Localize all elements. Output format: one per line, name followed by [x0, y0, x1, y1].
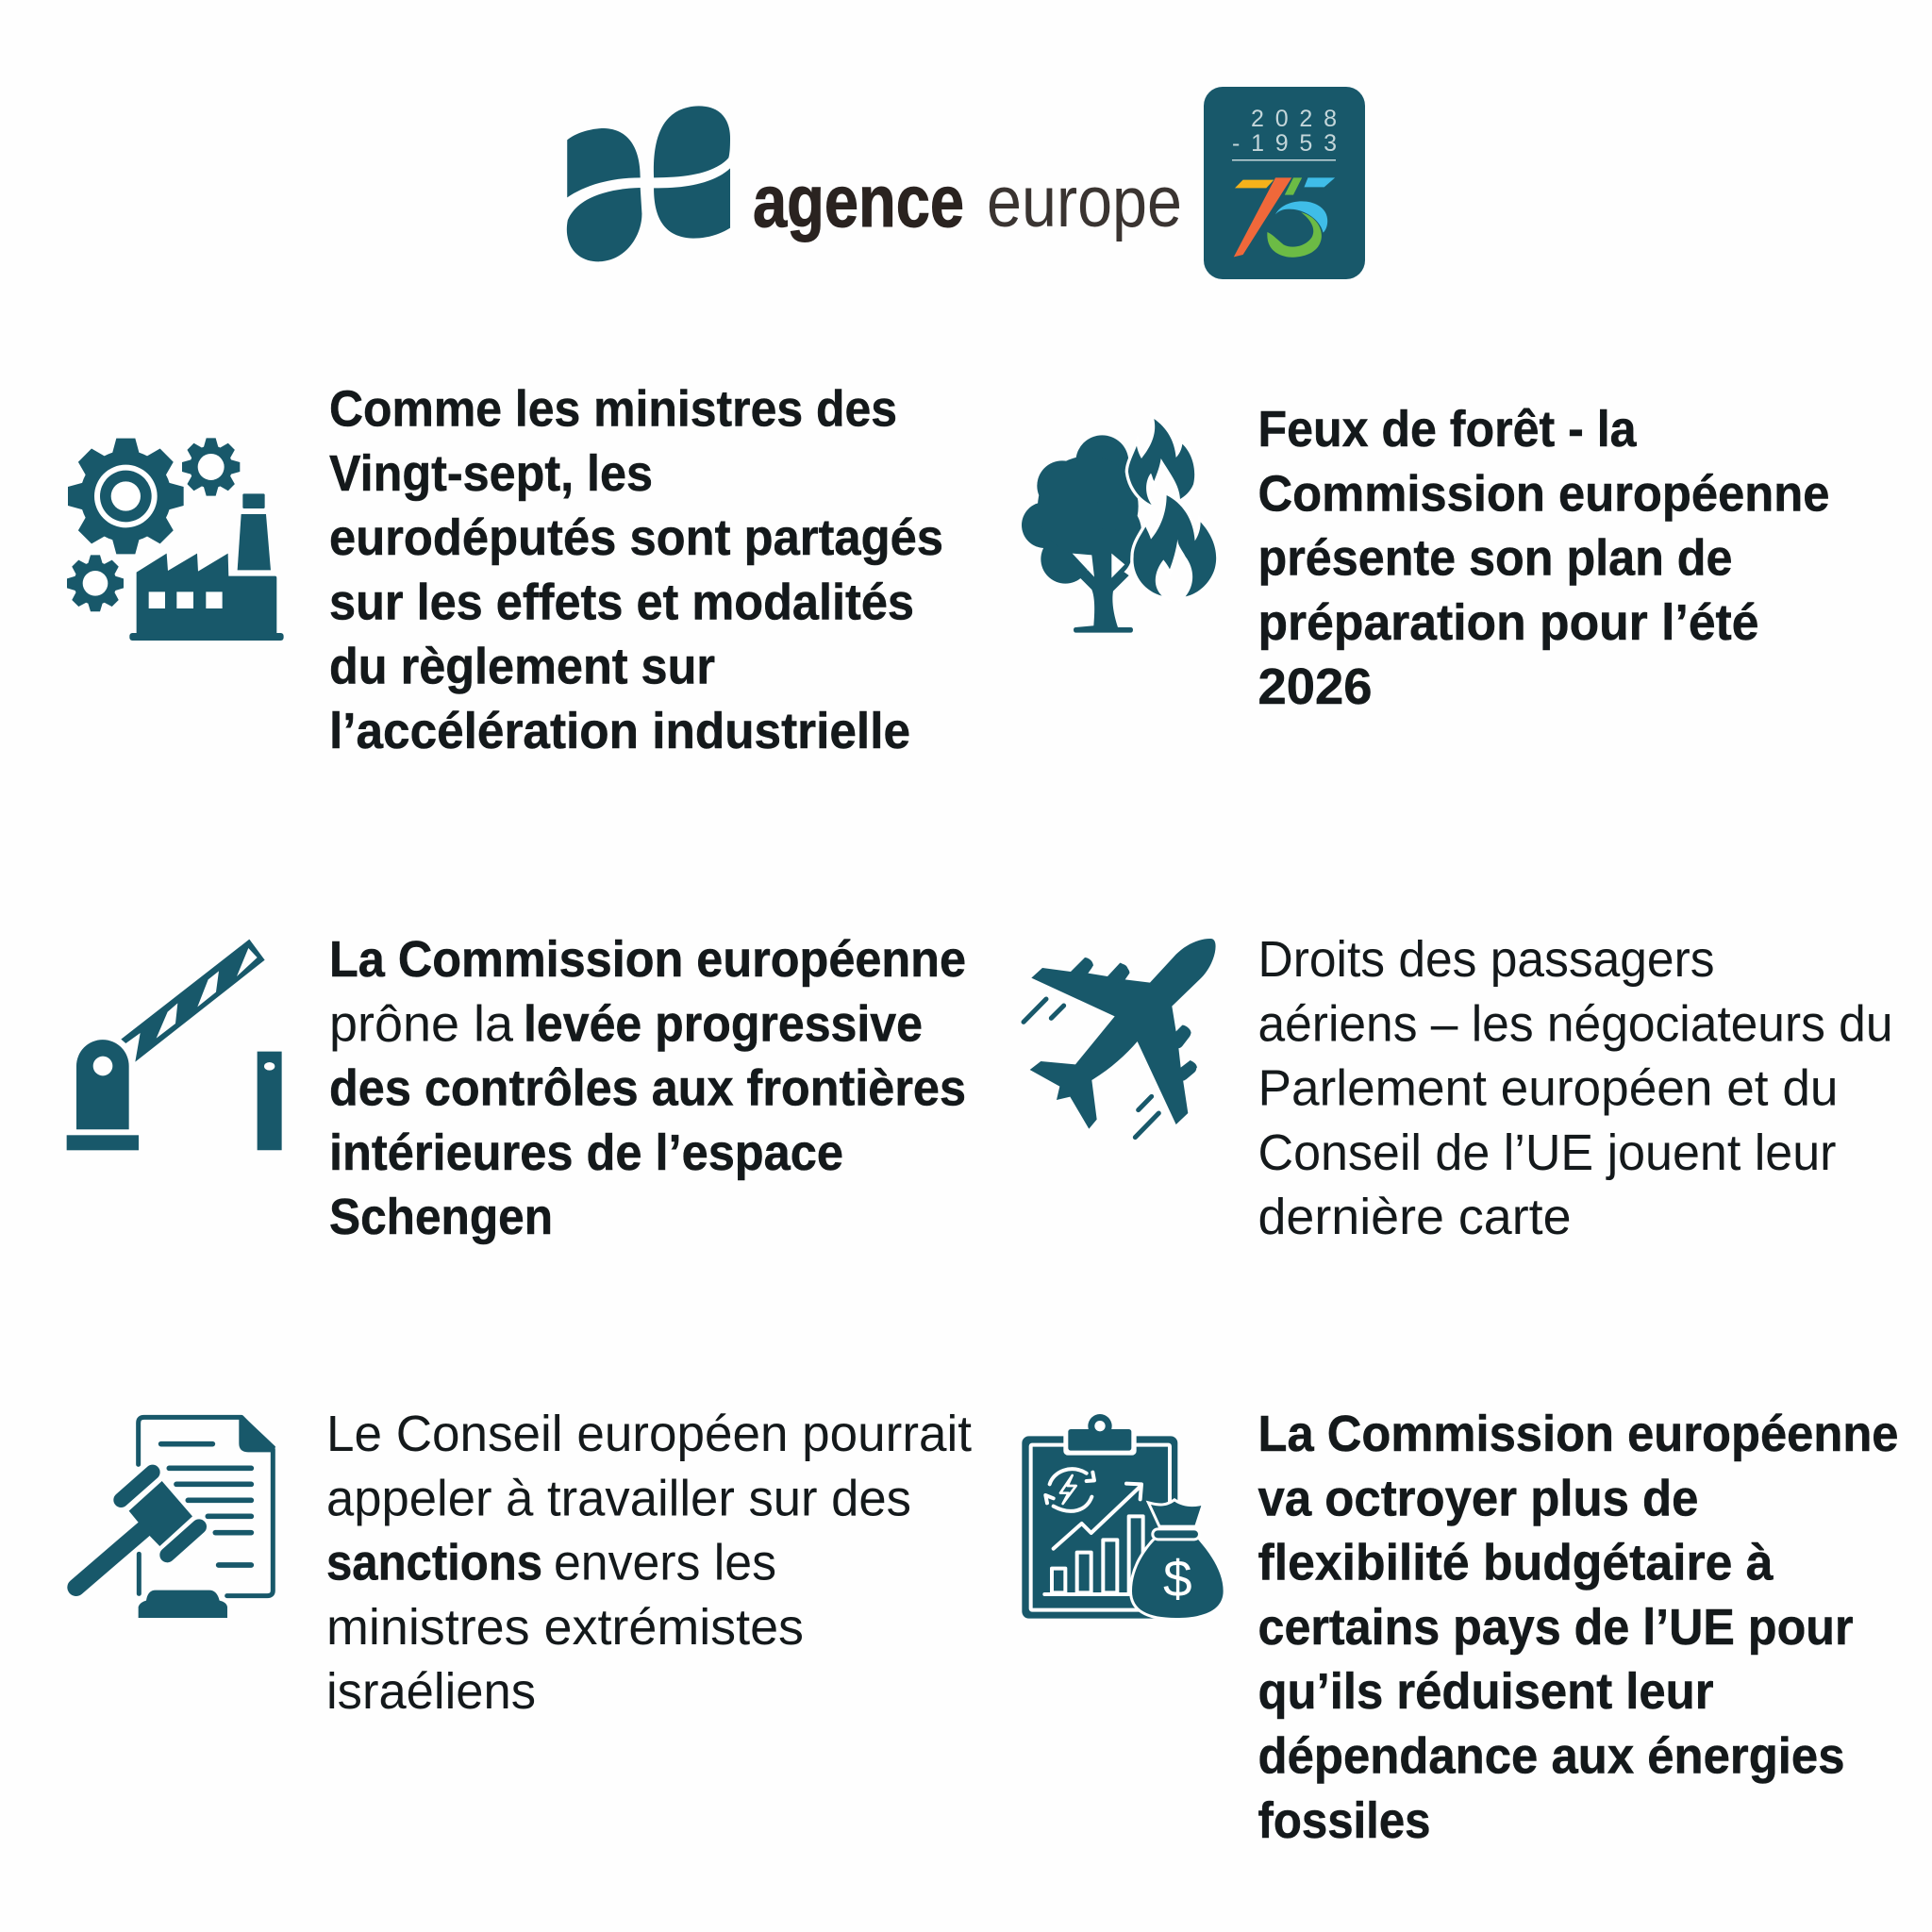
badge: 75 years: -1953: [1232, 130, 1337, 157]
logo: agence europe: [567, 87, 1365, 279]
text: feux de forêt: Commission européenne: [1258, 465, 1830, 522]
icon: budget clipboard and money bag: [1022, 1414, 1224, 1619]
icon: airplane: [1024, 939, 1216, 1138]
logo wordmark: agence: [753, 159, 964, 242]
text: sanctions ministres israéliens: israéliens: [326, 1663, 536, 1720]
text: règlement sur l'accélération industrielle: [329, 381, 943, 759]
text: sanctions ministres israéliens: [326, 1406, 972, 1720]
logo wordmark: [753, 159, 1182, 242]
text: levée progressive des contrôles: Schengen: [329, 1189, 553, 1245]
text: feux de forêt: [1258, 401, 1830, 715]
text: droits des passagers aériens: aériens – les négociateurs du: [1258, 995, 1892, 1052]
badge: 75 years: 2028: [1251, 106, 1337, 132]
text: levée progressive des contrôles: prône la: [329, 995, 514, 1052]
text: droits des passagers aériens: [1258, 931, 1892, 1245]
text: flexibilité budgétaire énergies fossiles: La Commission européenne: [1258, 1406, 1898, 1462]
icon: gears and factory: [67, 438, 284, 641]
text: règlement sur l'accélération industrielle: sur les effets et modalités: [329, 574, 914, 630]
text: feux de forêt: 2026: [1258, 658, 1372, 715]
text: droits des passagers aériens: Parlement européen et du: [1258, 1060, 1838, 1117]
text: levée progressive des contrôles: levée progressive: [524, 995, 923, 1052]
text: règlement sur l'accélération industrielle: eurodéputés sont partagés: [329, 509, 943, 566]
text: règlement sur l'accélération industrielle: du règlement sur: [329, 639, 715, 695]
text: droits des passagers aériens: Droits des passagers: [1258, 931, 1715, 988]
text: feux de forêt: Feux de forêt - la: [1258, 401, 1637, 458]
text: droits des passagers aériens: Conseil de l’UE jouent leur: [1258, 1124, 1837, 1181]
text: feux de forêt: présente son plan de: [1258, 530, 1732, 587]
text: flexibilité budgétaire énergies fossiles: dépendance aux énergies: [1258, 1728, 1845, 1785]
icon: border barrier: [67, 940, 282, 1150]
text: sanctions ministres israéliens: ministres extrémistes: [326, 1599, 804, 1656]
text: levée progressive des contrôles: La Commission européenne: [329, 931, 966, 988]
text: règlement sur l'accélération industrielle: l’accélération industrielle: [329, 703, 910, 759]
text: levée progressive des contrôles: intérieures de l’espace: [329, 1124, 843, 1181]
text: droits des passagers aériens: dernière carte: [1258, 1189, 1572, 1245]
text: levée progressive des contrôles: des contrôles aux frontières: [329, 1060, 966, 1117]
text: sanctions ministres israéliens: sanctions: [326, 1535, 542, 1591]
text: flexibilité budgétaire énergies fossiles: fossiles: [1258, 1792, 1430, 1849]
text: règlement sur l'accélération industrielle: Comme les ministres des: [329, 381, 897, 438]
text: règlement sur l'accélération industrielle: Vingt-sept, les: [329, 445, 653, 502]
logo wordmark: europe: [987, 162, 1182, 242]
text: flexibilité budgétaire énergies fossiles: certains pays de l’UE pour: [1258, 1599, 1853, 1656]
text: flexibilité budgétaire énergies fossiles: flexibilité budgétaire à: [1258, 1535, 1774, 1591]
badge: 75 years: [1204, 87, 1365, 279]
text: sanctions ministres israéliens: Le Conseil européen pourrait: [326, 1406, 972, 1462]
icon: budget clipboard and money bag: $: [1163, 1550, 1192, 1608]
text: sanctions ministres israéliens: envers les: [554, 1535, 776, 1591]
text: levée progressive des contrôles: [329, 931, 966, 1245]
icon: gavel and document: [76, 1415, 275, 1618]
logo mark: [567, 106, 730, 261]
text: flexibilité budgétaire énergies fossiles: [1258, 1406, 1898, 1849]
text: feux de forêt: préparation pour l’été: [1258, 594, 1758, 651]
text: flexibilité budgétaire énergies fossiles: va octroyer plus de: [1258, 1470, 1698, 1526]
text: sanctions ministres israéliens: appeler à travailler sur des: [326, 1470, 911, 1526]
icon: tree and flames: [1022, 419, 1216, 633]
text: flexibilité budgétaire énergies fossiles: qu’ils réduisent leur: [1258, 1663, 1713, 1720]
